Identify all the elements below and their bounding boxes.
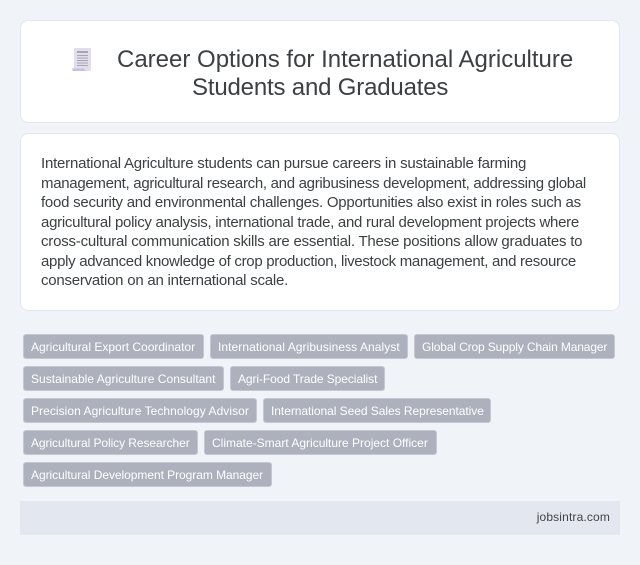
title: Students and Graduates (192, 74, 448, 101)
title: Career Options for International Agriculture (117, 46, 573, 73)
career tags (23, 334, 615, 487)
footer bar: jobsintra.com (537, 510, 610, 524)
career tags: Agricultural Export Coordinator (31, 340, 195, 354)
description text: International Agriculture students can pursue careers in sustainable farming (41, 155, 526, 172)
career tags: Agricultural Development Program Manager (31, 468, 263, 482)
description text (41, 155, 586, 289)
career tags: Agricultural Policy Researcher (31, 436, 190, 450)
description text: conservation on an international scale. (41, 272, 288, 289)
career tags: Climate-Smart Agriculture Project Officer (212, 436, 428, 450)
description text: food security and environmental challenges. Opportunities also exist in roles such as (41, 194, 581, 211)
title panel (20, 20, 620, 123)
title (117, 46, 573, 101)
description panel (20, 133, 620, 311)
icon: document scroll (72, 48, 91, 71)
career tags: International Agribusiness Analyst (218, 340, 400, 354)
description text: apply advanced knowledge of crop production, livestock management, and resource (41, 252, 576, 270)
description text: agricultural policy analysis, international trade, and rural development projects where (41, 214, 579, 230)
description text: cross-cultural communication skills are essential. These positions allow graduates to (41, 233, 582, 250)
career tags: Agri-Food Trade Specialist (238, 372, 377, 386)
career tags: Precision Agriculture Technology Advisor (31, 404, 249, 418)
footer bar (20, 501, 620, 535)
description text: management, agricultural research, and agribusiness development, addressing global (41, 174, 586, 192)
career tags: Sustainable Agriculture Consultant (31, 372, 215, 386)
career tags: Global Crop Supply Chain Manager (422, 340, 607, 354)
career tags: International Seed Sales Representative (271, 404, 484, 418)
